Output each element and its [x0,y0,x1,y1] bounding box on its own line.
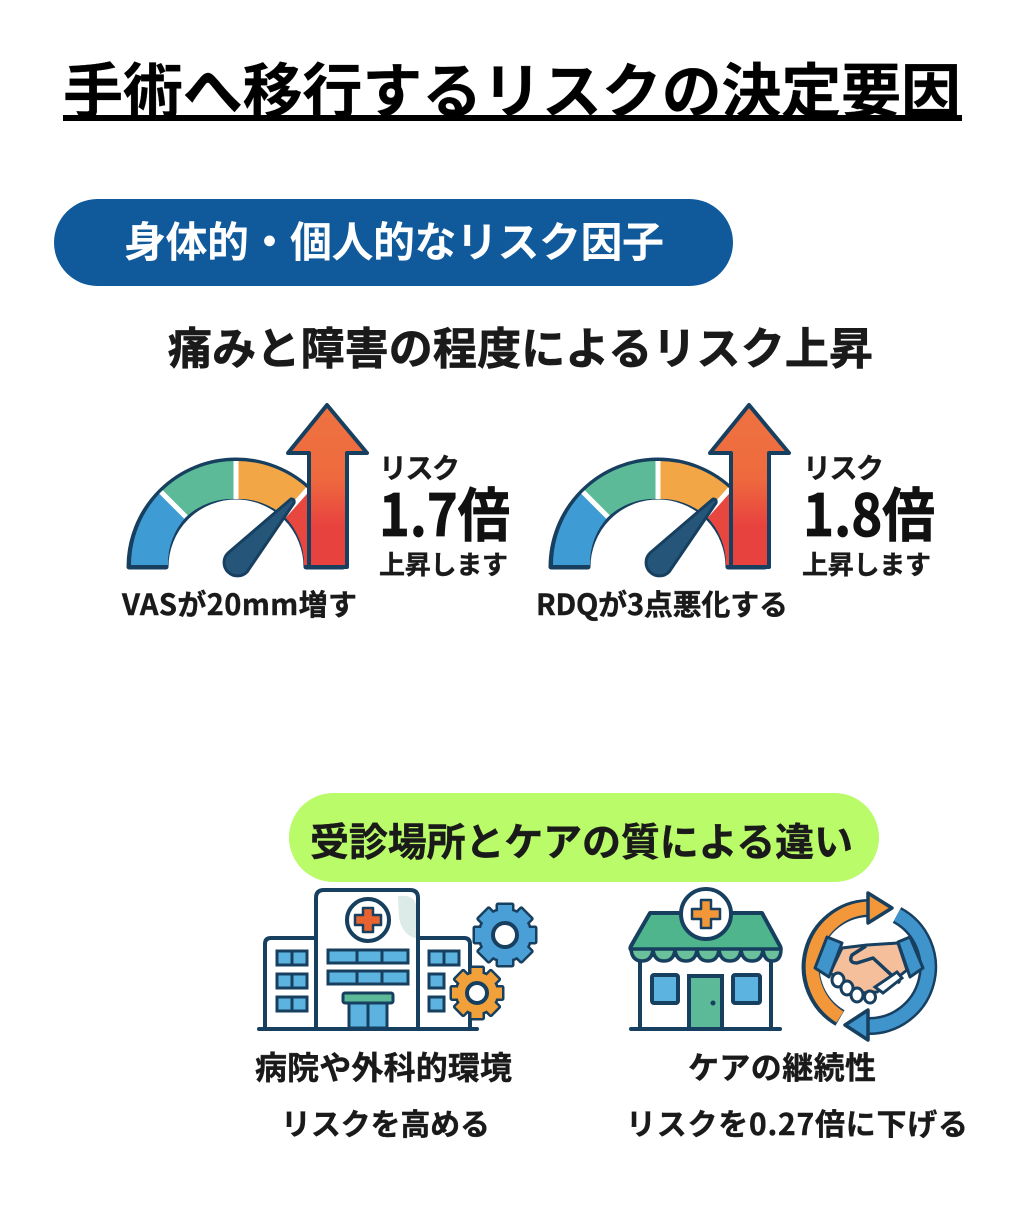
label: hospital environment: 病院や外科的環境 [255,1043,512,1089]
label: continuity of care: ケアの継続性 [688,1043,876,1088]
label: lowers risk to 0.27: リスクを0.27倍に下げる [626,1100,968,1144]
icon: handshake in a cycle [811,893,928,1040]
icon: clinic [630,889,781,1029]
risk multiplier: 1.8倍 [803,469,935,553]
gauge caption: VASが20mm増す [121,582,357,624]
label: raises risk: リスクを高める [281,1100,490,1144]
gauge caption: RDQが3点悪化する [536,582,788,624]
section heading: differences by care setting and quality [289,793,879,882]
risk rises label: 上昇します [379,545,508,582]
gauge panel: VAS [121,405,510,624]
risk label: リスク [379,447,460,487]
risk label: リスク [803,447,884,487]
risk rises label: 上昇します [802,545,931,582]
subheading: risk rise by pain and disability: 痛みと障害の程度によるリスク上昇 [168,313,873,377]
gauge icon: VAS [129,405,367,576]
section heading: physical and personal risk factors: 身体的・個人的なリスク因子 [124,209,664,270]
title: 手術へ移行するリスクの決定要因 [63,44,961,131]
section heading: differences by care setting and quality: 受診場所とケアの質による違い [310,812,853,868]
gauge icon: RDQ [551,405,789,576]
gauge panel: RDQ [536,405,935,624]
icon: hospital with gears [259,890,535,1029]
section heading: physical and personal risk factors [54,199,733,286]
risk multiplier: 1.7倍 [379,469,510,553]
